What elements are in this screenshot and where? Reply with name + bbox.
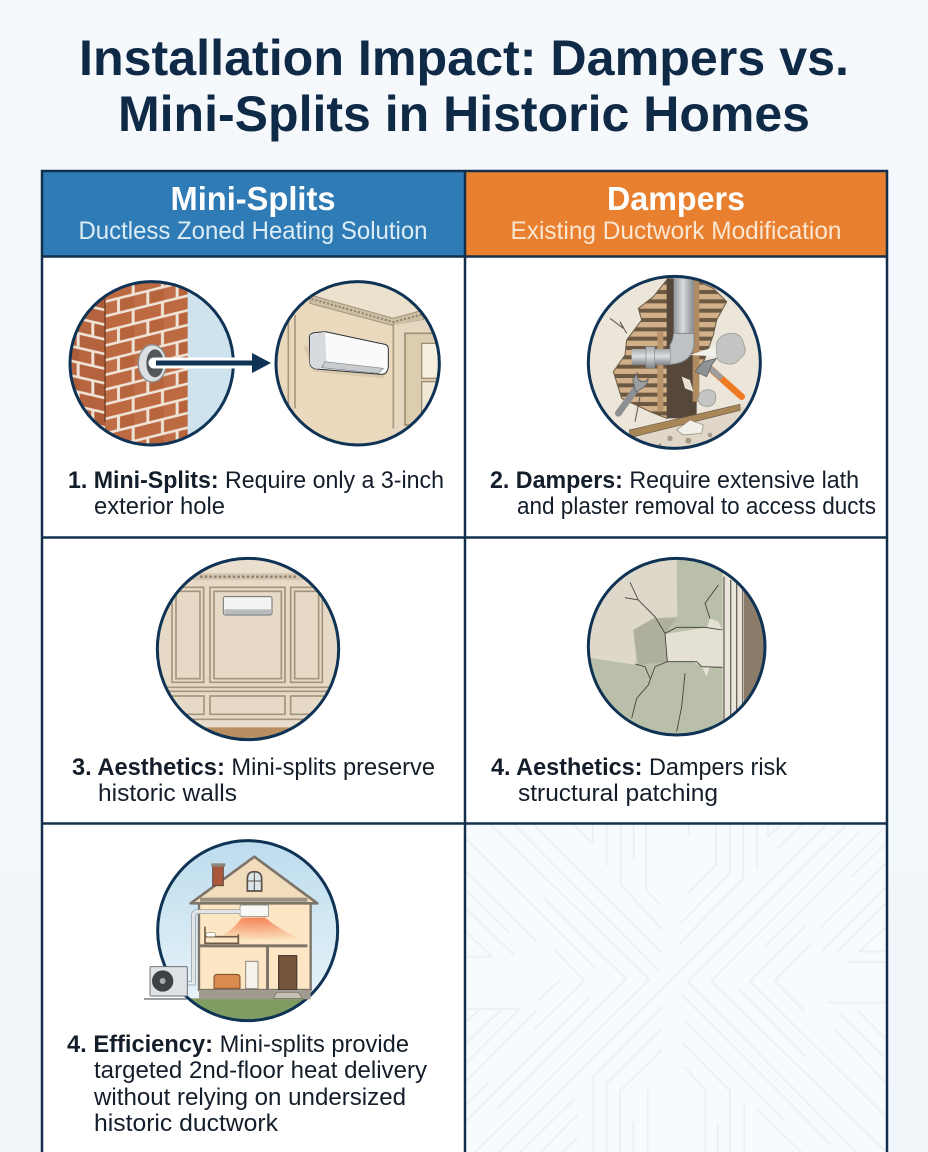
header: Dampers xyxy=(465,171,887,256)
icon: cracked patched plaster xyxy=(587,557,767,737)
panel: mini-split exterior hole xyxy=(67,278,445,520)
fridge xyxy=(246,961,258,989)
sofa xyxy=(214,974,240,988)
text: point 2 xyxy=(490,467,876,520)
header: Mini-Splits xyxy=(42,171,465,256)
panel: empty patterned cell xyxy=(466,825,887,1152)
text: point 3 xyxy=(72,754,435,807)
text: point 1: 1. Mini-Splits: Require only a 3-inch xyxy=(68,467,444,494)
text: point 4 aesthetics: structural patching xyxy=(518,780,718,807)
text: point 4 aesthetics xyxy=(491,754,788,807)
panel: efficiency xyxy=(67,840,427,1137)
panel: aesthetics dampers xyxy=(491,557,788,807)
door xyxy=(279,956,297,990)
text: point 4 efficiency: historic ductwork xyxy=(94,1110,279,1137)
title: Installation Impact: Dampers vs. xyxy=(79,30,849,86)
text: point 1: exterior hole xyxy=(94,493,225,520)
text: point 4 efficiency: without relying on undersized xyxy=(93,1084,406,1111)
arrow: hole to indoor unit xyxy=(154,353,271,373)
heat xyxy=(217,918,300,939)
text: point 4 efficiency: 4. Efficiency: Mini-splits provide xyxy=(67,1031,409,1058)
bed xyxy=(205,927,238,943)
title: Mini-Splits in Historic Homes xyxy=(118,86,810,142)
icon: indoor wall unit in historic room xyxy=(273,278,445,448)
text: point 2: and plaster removal to access ducts xyxy=(517,493,876,520)
icon: house cutaway with heat delivery xyxy=(144,840,340,1025)
wrench xyxy=(618,383,640,413)
text: point 3: 3. Aesthetics: Mini-splits preserve xyxy=(72,754,435,781)
text: point 4 efficiency xyxy=(67,1031,427,1137)
icon: paneled wall with small unit xyxy=(157,557,340,743)
text: point 4 efficiency: targeted 2nd-floor heat delivery xyxy=(94,1057,427,1084)
panel: aesthetics mini-split xyxy=(72,557,435,807)
text: point 2: 2. Dampers: Require extensive lath xyxy=(490,467,859,494)
text: point 3: historic walls xyxy=(98,780,237,807)
text: point 1 xyxy=(68,467,444,520)
panel: dampers plaster removal xyxy=(490,275,876,520)
text: point 4 aesthetics: 4. Aesthetics: Dampers risk xyxy=(491,754,788,781)
comparison table xyxy=(42,171,887,1152)
header: Mini-Splits: Ductless Zoned Heating Solution xyxy=(78,217,428,245)
foundation xyxy=(199,990,311,999)
icon: brick wall with 3-inch hole xyxy=(67,278,237,448)
outdoor unit xyxy=(150,967,187,996)
house body xyxy=(199,900,311,990)
icon: opened wall with duct and tools xyxy=(587,275,763,452)
hammer xyxy=(710,368,742,397)
header: Mini-Splits: Mini-Splits xyxy=(170,180,336,217)
dust xyxy=(690,345,720,357)
title xyxy=(79,30,849,142)
header: Dampers: Dampers xyxy=(607,180,745,217)
header: Dampers: Existing Ductwork Modification xyxy=(510,217,842,245)
